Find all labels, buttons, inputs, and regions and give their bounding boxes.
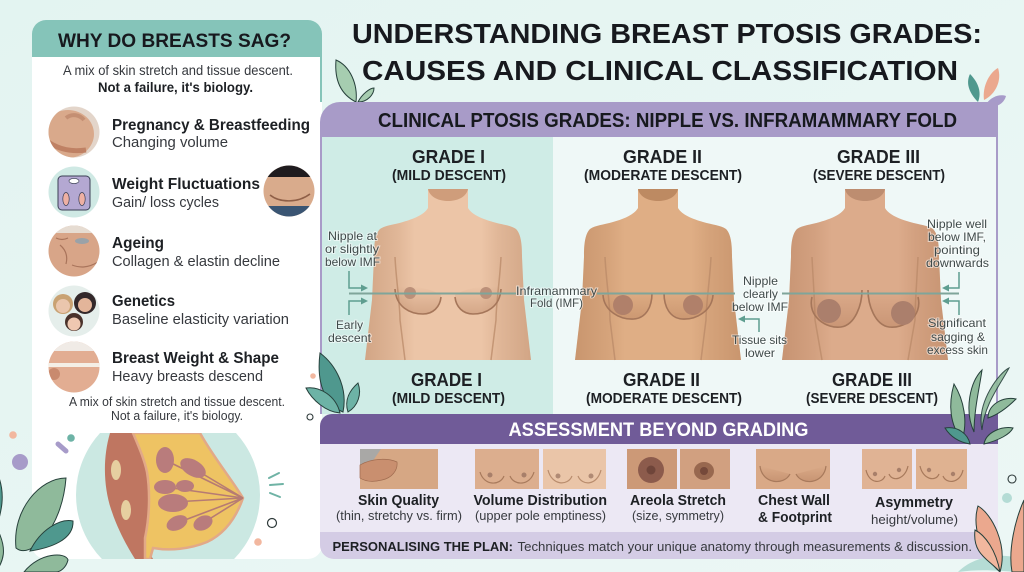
- decorative dots: right margin: [1002, 475, 1016, 503]
- personalising the plan bar: [320, 532, 998, 559]
- title: CAUSES AND CLINICAL CLASSIFICATION: [362, 55, 958, 86]
- cause: genetics: [48, 285, 289, 337]
- torso diagram: grade III: [782, 189, 948, 360]
- thumbnail: asymmetry one: [862, 449, 912, 489]
- annotation: nipple well below IMF: pointing: [934, 243, 980, 257]
- accents around diagram: [254, 473, 283, 546]
- assessment: asymmetry: Asymmetry: [875, 495, 953, 511]
- cause: ageing: Collagen & elastin decline: [112, 254, 280, 270]
- thumbnail: skin pinch: [360, 449, 438, 489]
- cause: breast weight and shape: [48, 341, 279, 393]
- annotation: inframammary fold: Inframammary: [516, 284, 597, 298]
- decorative sprig: lower left of grades panel: [306, 353, 360, 413]
- icon: three generations: [48, 285, 100, 337]
- personalising the plan bar: Techniques match your unique anatomy through measurements & discussion.: [518, 539, 972, 554]
- annotation: inframammary fold: [516, 284, 597, 310]
- thumbnail: areola two: [680, 449, 730, 489]
- assessment: volume distribution: (upper pole emptiness): [475, 509, 606, 523]
- annotation: nipple clearly below IMF: Nipple: [743, 274, 778, 288]
- panel: assessment beyond grading: [320, 414, 998, 559]
- grade III label top: GRADE III: [837, 147, 920, 167]
- grade I label top: (MILD DESCENT): [392, 168, 506, 184]
- panel: why do breasts sag: [32, 20, 322, 572]
- heading: assessment beyond grading: ASSESSMENT BEYOND GRADING: [508, 420, 808, 441]
- torso diagram: grade II: [575, 189, 741, 360]
- annotation: tissue sits lower: [732, 333, 787, 360]
- annotation: nipple clearly below IMF: below IMF: [732, 300, 788, 314]
- column: grade I background: [322, 137, 553, 414]
- annotation: inframammary fold: Fold (IMF): [530, 296, 583, 310]
- anatomical cross-section diagram: [76, 433, 260, 559]
- assessment: chest wall and footprint: & Footprint: [758, 510, 832, 526]
- assessment: chest wall and footprint: [756, 449, 832, 526]
- intro text: A mix of skin stretch and tissue descent.: [63, 63, 293, 78]
- grade I label bottom: (MILD DESCENT): [392, 391, 505, 407]
- thumbnail: areola one: [627, 449, 677, 489]
- annotation: nipple well below IMF: downwards: [926, 256, 989, 270]
- assessment: skin quality: [336, 449, 462, 523]
- cause: pregnancy and breastfeeding: [42, 106, 310, 158]
- assessment: chest wall and footprint: Chest Wall: [758, 493, 830, 509]
- annotation: nipple at or slightly below IMF: [325, 229, 380, 269]
- grade III label bottom: [806, 370, 938, 407]
- icon: older face: [48, 225, 100, 277]
- icon: abdomen: [263, 165, 315, 218]
- thumbnail: chest view two: [543, 449, 606, 489]
- cause: ageing: [48, 225, 280, 277]
- closing text: Not a failure, it's biology.: [111, 408, 243, 423]
- annotation: nipple clearly below IMF: clearly: [743, 287, 778, 301]
- decorative accents: lower left of grades panel: [307, 373, 316, 420]
- grade I label top: [392, 147, 506, 184]
- annotation: tissue sits lower: lower: [745, 346, 775, 360]
- chest wall: [105, 433, 153, 559]
- grade I label top: GRADE I: [412, 147, 485, 167]
- annotation: nipple well below IMF: [926, 217, 989, 270]
- grade I label bottom: [392, 370, 505, 407]
- annotation: nipple well below IMF: below IMF,: [928, 230, 986, 244]
- grade II label bottom: [586, 370, 742, 407]
- inframammary fold line: [349, 292, 959, 294]
- decorative leaves and dots: lower left: [9, 431, 38, 470]
- grade II label top: [584, 147, 742, 184]
- icon: pregnant belly: [48, 106, 100, 158]
- grade II label top: GRADE II: [623, 147, 702, 167]
- arrow: tissue sits lower: [738, 316, 759, 332]
- cause: pregnancy and breastfeeding: Changing volume: [112, 135, 228, 151]
- assessment: skin quality: Skin Quality: [358, 493, 439, 509]
- heading: clinical ptosis grades: CLINICAL PTOSIS GRADES: NIPPLE VS. INFRAMAMMARY FOLD: [378, 110, 957, 132]
- assessment: asymmetry: height/volume): [871, 513, 958, 527]
- assessment: volume distribution: [474, 449, 607, 523]
- decorative sprig: top right of main panel: [968, 68, 1006, 106]
- annotation: significant sagging and excess skin: [927, 316, 988, 357]
- annotation: nipple at or slightly below IMF: or slightly: [325, 242, 379, 256]
- arrow: to nipple level grade I: [349, 271, 368, 292]
- annotation: significant sagging and excess skin: sagging &: [931, 330, 985, 344]
- grade III label bottom: GRADE III: [832, 370, 912, 390]
- panel header: [32, 20, 322, 57]
- icon: weighing scale: [48, 166, 100, 218]
- assessment: areola stretch: Areola Stretch: [630, 493, 726, 509]
- annotation: early descent: [328, 318, 372, 345]
- grade I label bottom: GRADE I: [411, 370, 482, 390]
- cause: weight fluctuations: Gain/ loss cycles: [112, 195, 219, 211]
- grade II label bottom: (MODERATE DESCENT): [586, 391, 742, 407]
- cause: genetics: Baseline elasticity variation: [112, 312, 289, 328]
- icon: measuring tape: [48, 341, 100, 393]
- decorative leaves: lower right: [958, 500, 1024, 572]
- grade II label bottom: GRADE II: [623, 370, 700, 390]
- fatty tissue: [133, 433, 243, 559]
- arrow: significant sagging: [942, 298, 959, 315]
- cause: breast weight and shape: Breast Weight & Shape: [112, 350, 279, 367]
- cause: ageing: Ageing: [112, 235, 164, 252]
- intro text: [63, 63, 293, 95]
- decorative sprig: right of grades panel: [945, 368, 1016, 444]
- closing text: [69, 394, 285, 423]
- lobules: [156, 447, 174, 473]
- assessment: areola stretch: (size, symmetry): [632, 509, 724, 523]
- intro text: Not a failure, it's biology.: [98, 80, 253, 95]
- heading: why do breasts sag: WHY DO BREASTS SAG?: [58, 31, 291, 52]
- cause: weight fluctuations: [48, 165, 315, 218]
- cause: breast weight and shape: Heavy breasts descend: [112, 369, 263, 385]
- annotation: significant sagging and excess skin: Significant: [928, 316, 987, 330]
- grade III label top: (SEVERE DESCENT): [813, 168, 945, 184]
- annotation: significant sagging and excess skin: excess skin: [927, 343, 988, 357]
- annotation: nipple at or slightly below IMF: Nipple at: [328, 229, 378, 243]
- title: [352, 18, 982, 86]
- assessment: asymmetry: [862, 449, 967, 527]
- cause: pregnancy and breastfeeding: Pregnancy & Breastfeeding: [112, 117, 310, 134]
- annotation: tissue sits lower: Tissue sits: [732, 333, 787, 347]
- personalising the plan bar: PERSONALISING THE PLAN:: [332, 539, 513, 554]
- grade III label bottom: (SEVERE DESCENT): [806, 391, 938, 407]
- column: grades II and III background: [553, 137, 996, 414]
- closing text: A mix of skin stretch and tissue descent.: [69, 394, 285, 409]
- assessment: volume distribution: Volume Distribution: [474, 493, 607, 509]
- thumbnail: asymmetry two: [916, 449, 967, 489]
- thumbnail: chest view one: [475, 449, 539, 489]
- thumbnail: chest wall: [756, 449, 830, 489]
- annotation: nipple well below IMF: Nipple well: [927, 217, 987, 231]
- annotation: nipple at or slightly below IMF: below IMF: [325, 255, 380, 269]
- annotation: early descent: Early: [336, 318, 363, 332]
- assessment: skin quality: (thin, stretchy vs. firm): [336, 509, 462, 523]
- panel: clinical ptosis grades: [320, 102, 998, 414]
- decorative sprig: top left of main panel: [336, 60, 374, 102]
- arrow: nipple level grade III: [942, 272, 959, 292]
- grade III label top: [813, 147, 945, 184]
- milk ducts: [173, 463, 244, 520]
- title: UNDERSTANDING BREAST PTOSIS GRADES:: [352, 18, 982, 49]
- cause: genetics: Genetics: [112, 293, 175, 310]
- grade II label top: (MODERATE DESCENT): [584, 168, 742, 184]
- torso diagram: grade I: [365, 189, 531, 360]
- decorative leaves: lower left: [0, 434, 75, 572]
- annotation: nipple clearly below IMF: [732, 274, 788, 314]
- assessment: areola stretch: [627, 449, 730, 523]
- cause: weight fluctuations: Weight Fluctuations: [112, 176, 260, 193]
- annotation: early descent: descent: [328, 331, 372, 345]
- arrow: early descent: [349, 298, 368, 315]
